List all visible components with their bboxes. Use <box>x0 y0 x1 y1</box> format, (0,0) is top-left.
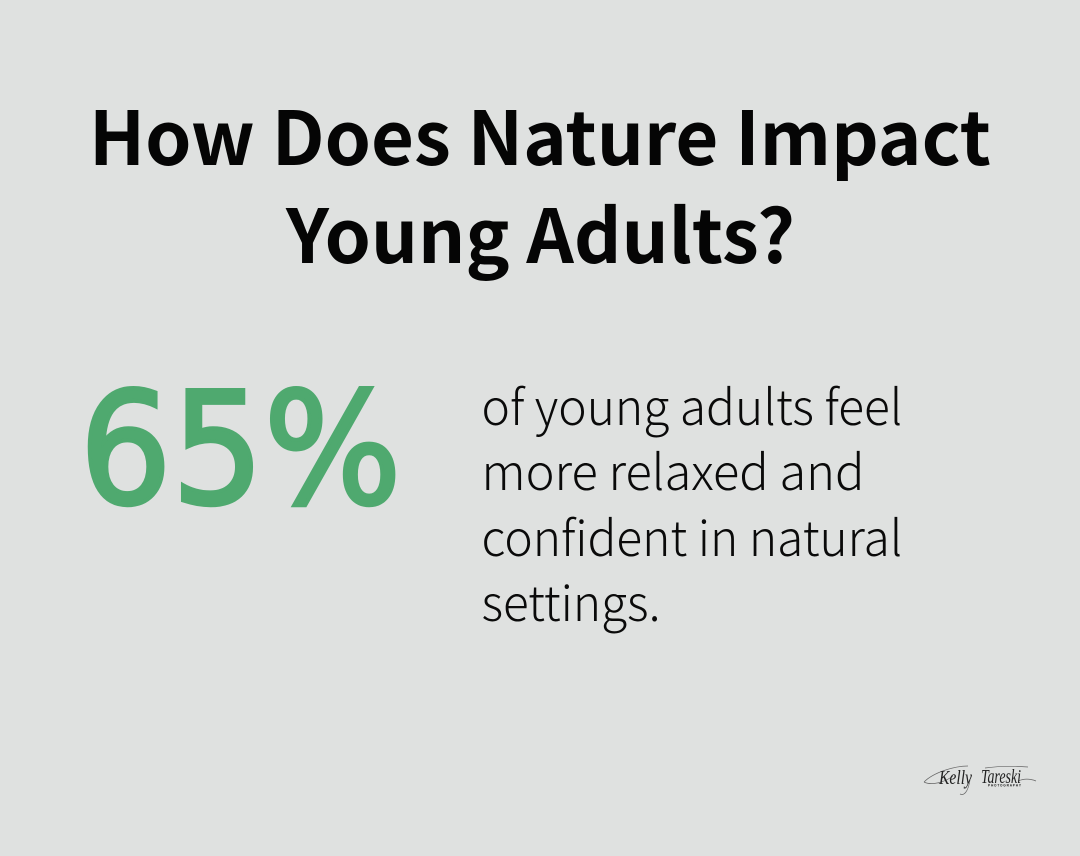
statistic description: settings. <box>482 565 660 636</box>
statistic description: of young adults feel <box>482 369 902 440</box>
photographer signature logo: Kelly <box>938 767 972 789</box>
statistic description: more relaxed and <box>482 434 864 505</box>
title: How Does Nature Impact <box>89 80 991 187</box>
statistic description: confident in natural <box>482 500 902 571</box>
photographer signature logo: PHOTOGRAPHY <box>988 784 1022 788</box>
title <box>89 80 991 285</box>
statistic: 65%: 65% <box>80 359 402 540</box>
photographer signature logo <box>924 766 1036 794</box>
photographer signature logo: Tareski <box>981 766 1021 788</box>
statistic description <box>482 369 902 636</box>
title: Young Adults? <box>285 178 795 285</box>
